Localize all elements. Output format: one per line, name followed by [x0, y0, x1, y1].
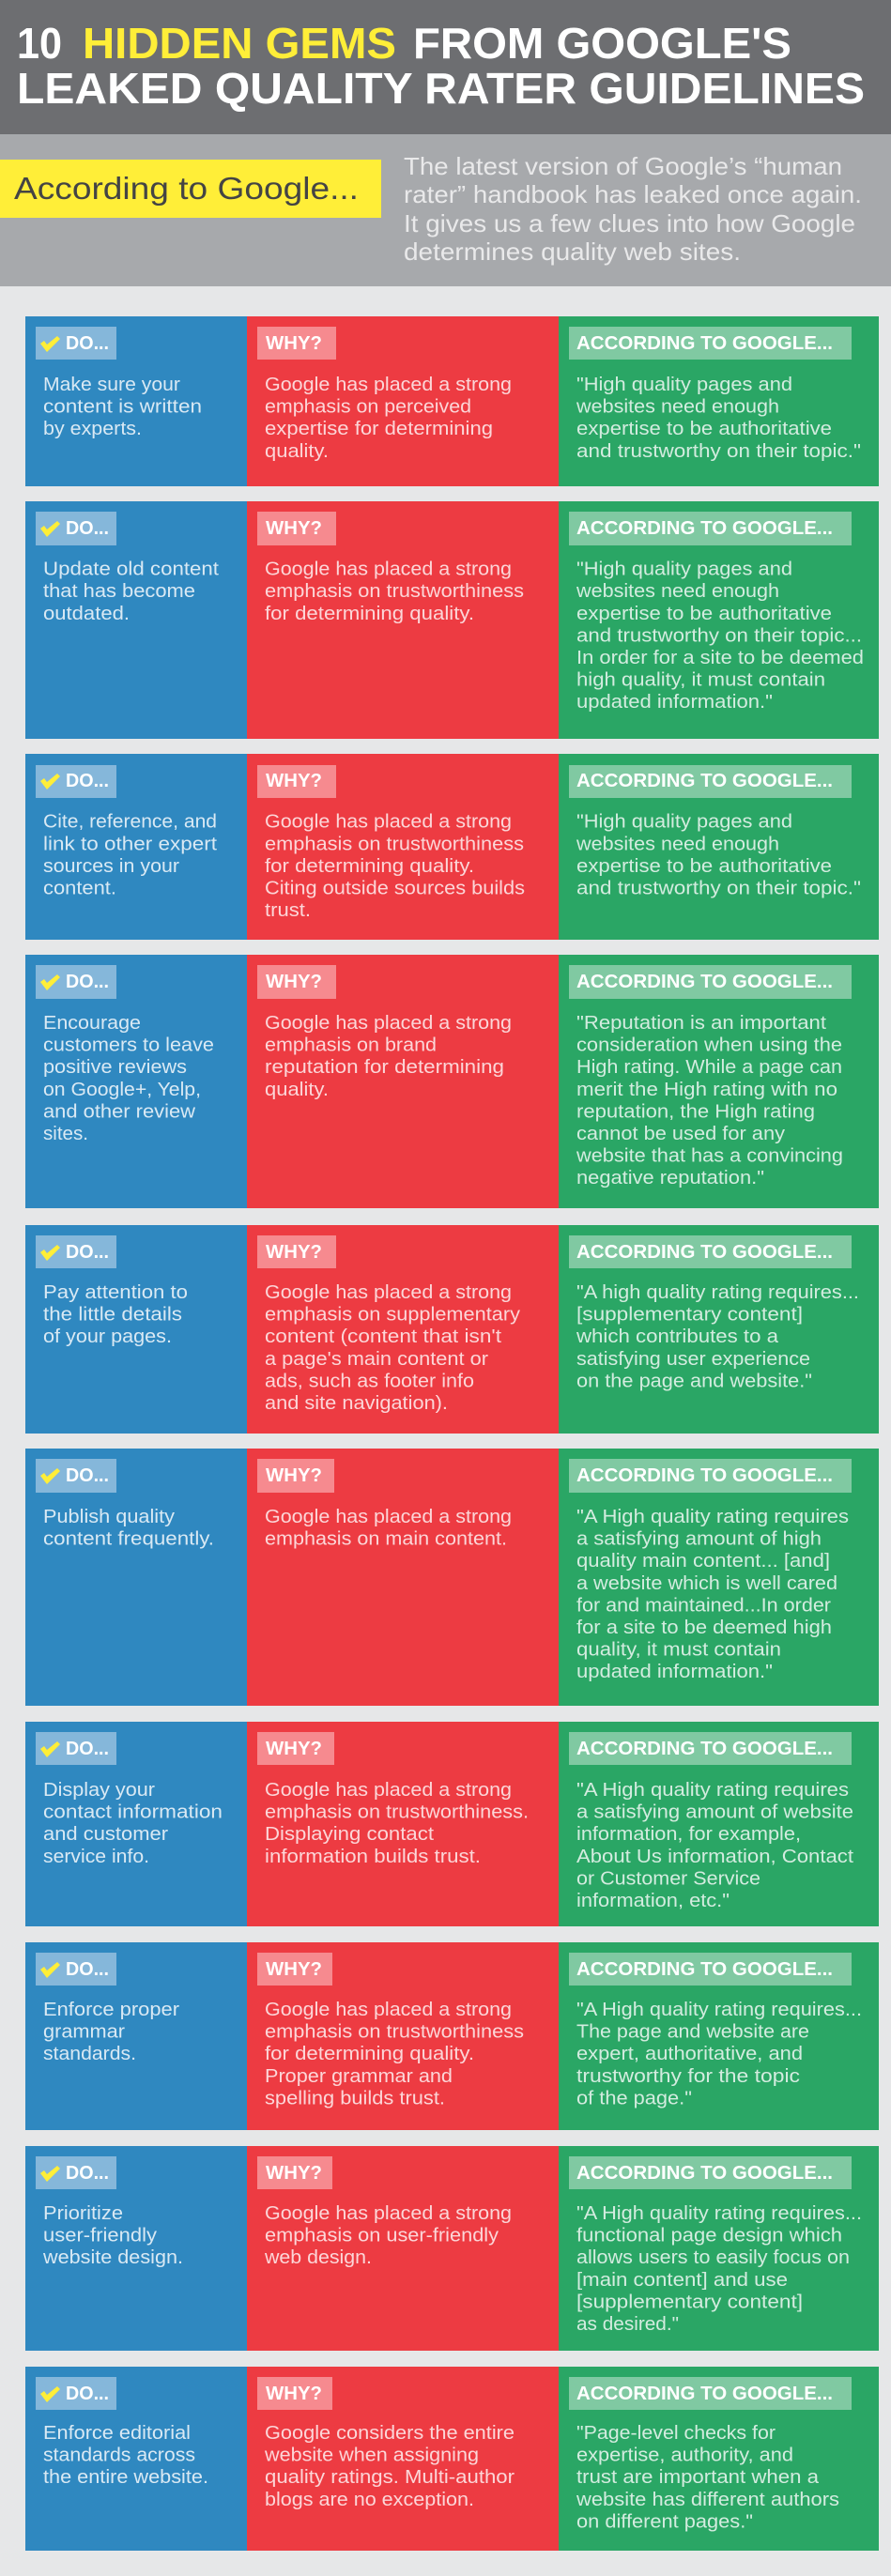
column: according to google: for a site to be deemed high — [576, 1618, 832, 1638]
column: do: on Google+, Yelp, — [43, 1080, 201, 1100]
column: do: Enforce editorial — [43, 2423, 191, 2444]
column: why: emphasis on trustworthiness — [265, 581, 524, 602]
column: according to google: "Page-level checks for — [576, 2423, 776, 2444]
column: according to google: information, etc." — [576, 1891, 730, 1911]
column: according to google: ACCORDING TO GOOGLE... — [576, 333, 833, 354]
column: according to google: updated information." — [576, 1662, 773, 1682]
column: why: content (content that isn't — [265, 1326, 501, 1347]
title: HIDDEN GEMS — [83, 19, 396, 68]
column: according to google: a satisfying amount of high — [576, 1529, 822, 1550]
intro text — [404, 152, 862, 266]
column: do: DO... — [66, 2163, 109, 2184]
column: do: Update old content — [43, 560, 219, 580]
column: why: ads, such as footer info — [265, 1371, 474, 1391]
panel: row 7 — [25, 1722, 879, 1926]
column: why: quality. — [265, 441, 329, 462]
column: do: sources in your — [43, 856, 179, 877]
column: according to google: ACCORDING TO GOOGLE... — [576, 771, 833, 791]
column: why: WHY? — [266, 1465, 322, 1486]
column: according to google: cannot be used for any — [576, 1124, 785, 1144]
column: why: emphasis on trustworthiness — [265, 834, 524, 854]
column: according to google: ACCORDING TO GOOGLE... — [576, 1465, 833, 1486]
column: why: Google has placed a strong — [265, 375, 512, 395]
column: why: Google has placed a strong — [265, 2000, 512, 2020]
intro text: It gives us a few clues into how Google — [404, 209, 855, 238]
column: do: Pay attention to — [43, 1282, 188, 1303]
column: according to google: websites need enough — [576, 581, 779, 602]
column: why: quality. — [265, 1080, 329, 1100]
column: according to google: "A high quality rating requires... — [576, 1282, 859, 1303]
column: do: standards across — [43, 2446, 195, 2466]
column: according to google: "Reputation is an important — [576, 1013, 826, 1034]
column: do: website design. — [42, 2247, 183, 2268]
column: according to google: on the page and website." — [576, 1371, 812, 1391]
column: do: DO... — [66, 972, 109, 992]
column: according to google: About Us information, Contact — [576, 1847, 853, 1867]
column: according to google: "High quality pages and — [576, 375, 792, 395]
column: according to google: ACCORDING TO GOOGLE... — [576, 1959, 833, 1980]
column: do: by experts. — [43, 419, 142, 439]
column: why — [247, 1225, 559, 1434]
column: do — [25, 754, 247, 940]
panel: row 3 — [25, 754, 879, 940]
column: according to google — [559, 1722, 879, 1926]
column: do: DO... — [66, 2384, 109, 2404]
column: why: Google has placed a strong — [265, 1013, 512, 1034]
column: according to google: quality, it must contain — [576, 1640, 781, 1661]
column: according to google — [559, 1449, 879, 1706]
column: do: the entire website. — [43, 2467, 208, 2488]
column: do: Prioritize — [43, 2203, 123, 2224]
column: why: for determining quality. — [265, 2044, 474, 2064]
panel: row 8 — [25, 1942, 879, 2130]
column: according to google: websites need enough — [576, 834, 779, 854]
column: why: Displaying contact — [265, 1824, 434, 1845]
column: do: Cite, reference, and — [43, 812, 217, 833]
column: do: DO... — [66, 1242, 109, 1263]
column: according to google: of the page." — [576, 2088, 692, 2108]
column: according to google: for and maintained...In order — [576, 1595, 831, 1616]
column: why: Citing outside sources builds — [265, 879, 525, 899]
column: do: the little details — [43, 1305, 182, 1326]
column: do: grammar — [43, 2022, 125, 2043]
column: according to google — [559, 754, 879, 940]
column: according to google: In order for a site to be deemed — [576, 648, 864, 668]
panel: row 2 — [25, 501, 879, 739]
column: do — [25, 501, 247, 739]
column: why: WHY? — [266, 972, 322, 992]
column: why: Google has placed a strong — [265, 2203, 512, 2224]
column: why: WHY? — [266, 771, 322, 791]
column: according to google: a satisfying amount of website — [576, 1802, 853, 1823]
title: 10 — [17, 19, 62, 68]
column: according to google: [main content] and use — [576, 2270, 788, 2291]
column: why: trust. — [265, 900, 311, 921]
column: according to google: expertise to be authoritative — [576, 604, 832, 624]
column: according to google: a website which is well cared — [576, 1573, 837, 1594]
column: do: outdated. — [43, 604, 130, 624]
column: according to google — [559, 316, 879, 486]
column: do: link to other expert — [43, 834, 217, 854]
column: do: Make sure your — [43, 375, 180, 395]
column: do: Enforce proper — [43, 2000, 179, 2020]
title — [17, 19, 865, 113]
column: why: WHY? — [266, 333, 322, 354]
column: do: DO... — [66, 518, 109, 539]
column: why: information builds trust. — [265, 1847, 481, 1867]
column: according to google: expertise to be authoritative — [576, 419, 832, 439]
column: why: emphasis on trustworthiness — [265, 2022, 524, 2043]
column: why — [247, 1449, 559, 1706]
column: why — [247, 1942, 559, 2130]
column: why: expertise for determining — [265, 419, 493, 439]
column: do: DO... — [66, 771, 109, 791]
column: why: and site navigation). — [265, 1393, 448, 1414]
column: according to google: and trustworthy on their topic." — [576, 879, 861, 899]
column: according to google: trustworthy for the topic — [576, 2066, 800, 2087]
column: why: emphasis on supplementary — [265, 1305, 520, 1326]
column: why: emphasis on main content. — [265, 1529, 507, 1550]
column: do: sites. — [43, 1124, 88, 1144]
column: according to google: updated information." — [576, 692, 773, 713]
column: according to google: or Customer Service — [576, 1868, 760, 1889]
column: do — [25, 1225, 247, 1434]
column: according to google — [559, 1225, 879, 1434]
column: according to google: quality main content... [and] — [576, 1551, 830, 1572]
column: according to google: functional page design which — [576, 2226, 842, 2246]
column: do: content. — [43, 879, 116, 899]
callout: According to Google — [0, 160, 381, 218]
column: why: emphasis on user-friendly — [265, 2226, 499, 2246]
column: according to google: "High quality pages and — [576, 812, 792, 833]
column: why: Google has placed a strong — [265, 1282, 512, 1303]
callout: According to Google: According to Google... — [14, 171, 359, 206]
column: do — [25, 1449, 247, 1706]
column: do: DO... — [66, 1465, 109, 1486]
panel: row 5 — [25, 1225, 879, 1434]
column: according to google: and trustworthy on their topic." — [576, 441, 861, 462]
column: according to google: ACCORDING TO GOOGLE... — [576, 2163, 833, 2184]
column: why: WHY? — [266, 1739, 322, 1759]
column: according to google — [559, 2367, 879, 2551]
column: why: Google has placed a strong — [265, 1780, 512, 1801]
panel: row 1 — [25, 316, 879, 486]
column: do: content frequently. — [43, 1529, 214, 1550]
column: do: user-friendly — [43, 2226, 157, 2246]
column: according to google: allows users to easily focus on — [576, 2247, 850, 2268]
column: according to google: The page and website are — [576, 2022, 809, 2043]
panel: row 6 — [25, 1449, 879, 1706]
column: do — [25, 2146, 247, 2351]
column: according to google — [559, 501, 879, 739]
column: according to google: which contributes to a — [576, 1326, 779, 1347]
column: why: emphasis on brand — [265, 1035, 437, 1056]
column: do — [25, 2367, 247, 2551]
column: according to google: ACCORDING TO GOOGLE... — [576, 518, 833, 539]
column: why: spelling builds trust. — [265, 2088, 445, 2108]
column: why: WHY? — [266, 2163, 322, 2184]
column: why: website when assigning — [264, 2446, 479, 2466]
column: do: customers to leave — [43, 1035, 214, 1056]
title: FROM GOOGLE'S — [413, 19, 791, 68]
column: why: WHY? — [266, 518, 322, 539]
column: do: and customer — [43, 1824, 168, 1845]
intro band — [0, 134, 891, 286]
panel: row 10 — [25, 2367, 879, 2551]
column: according to google: High rating. While a page can — [576, 1057, 842, 1078]
column: why — [247, 2367, 559, 2551]
column: according to google: website has different authors — [576, 2490, 839, 2510]
column: do: DO... — [66, 1739, 109, 1759]
column: according to google: "A High quality rating requires — [576, 1507, 849, 1527]
column: do — [25, 1942, 247, 2130]
intro text: determines quality web sites. — [404, 238, 741, 266]
column: why: for determining quality. — [265, 604, 474, 624]
intro text: The latest version of Google’s “human — [404, 152, 842, 180]
column: according to google: information, for example, — [576, 1824, 801, 1845]
column: do — [25, 1722, 247, 1926]
column: do — [25, 955, 247, 1208]
header: title band — [0, 0, 891, 134]
column: according to google: trust are important when a — [576, 2467, 820, 2488]
panel: row 4 — [25, 955, 879, 1208]
column: according to google: reputation, the High rating — [576, 1101, 815, 1122]
column: why: a page's main content or — [265, 1349, 488, 1370]
column: according to google: "High quality pages and — [576, 560, 792, 580]
column: according to google: high quality, it must contain — [576, 670, 825, 691]
column: according to google: website that has a convincing — [576, 1146, 843, 1167]
column: do — [25, 316, 247, 486]
column: according to google: websites need enough — [576, 397, 779, 418]
title: LEAKED QUALITY RATER GUIDELINES — [17, 64, 865, 113]
column: why — [247, 316, 559, 486]
column: according to google: consideration when using the — [576, 1035, 842, 1056]
column: do: that has become — [43, 581, 195, 602]
column: according to google: ACCORDING TO GOOGLE... — [576, 972, 833, 992]
column: why: for determining quality. — [265, 856, 474, 877]
column: according to google: expertise to be authoritative — [576, 856, 832, 877]
column: why: web design. — [264, 2247, 372, 2268]
column: according to google — [559, 955, 879, 1208]
column: do: Encourage — [43, 1013, 141, 1034]
column: do: Publish quality — [43, 1507, 175, 1527]
column: why — [247, 2146, 559, 2351]
column: why: WHY? — [266, 1959, 322, 1980]
column: why — [247, 754, 559, 940]
column: according to google: expertise, authority, and — [576, 2446, 793, 2466]
column: why: WHY? — [266, 1242, 322, 1263]
column: do: and other review — [43, 1101, 196, 1122]
column: do: DO... — [66, 333, 109, 354]
column: why: Google considers the entire — [265, 2423, 515, 2444]
column: why — [247, 955, 559, 1208]
column: according to google: ACCORDING TO GOOGLE... — [576, 1739, 833, 1759]
column: why: Google has placed a strong — [265, 812, 512, 833]
column: according to google: expert, authoritative, and — [576, 2044, 803, 2064]
column: according to google: as desired." — [576, 2314, 679, 2335]
column: according to google: and trustworthy on their topic... — [576, 625, 862, 646]
column: do: service info. — [43, 1847, 149, 1867]
column: according to google: ACCORDING TO GOOGLE... — [576, 2384, 833, 2404]
column: according to google: [supplementary content] — [576, 2292, 803, 2312]
column: do: DO... — [66, 1959, 109, 1980]
intro text: rater” handbook has leaked once again. — [404, 180, 862, 208]
column: do: contact information — [43, 1802, 223, 1823]
column: why: Google has placed a strong — [265, 1507, 512, 1527]
column: why — [247, 1722, 559, 1926]
column: according to google — [559, 2146, 879, 2351]
column: why: reputation for determining — [265, 1057, 504, 1078]
panel: row 9 — [25, 2146, 879, 2351]
column: do: positive reviews — [43, 1057, 187, 1078]
column: why: blogs are no exception. — [265, 2490, 474, 2510]
column: according to google: "A High quality rating requires... — [576, 2203, 862, 2224]
column: why: emphasis on trustworthiness. — [265, 1802, 529, 1823]
column: according to google: ACCORDING TO GOOGLE... — [576, 1242, 833, 1263]
column: according to google: "A High quality rating requires — [576, 1780, 849, 1801]
column: according to google: satisfying user experience — [576, 1349, 810, 1370]
column: do: content is written — [43, 397, 202, 418]
column: according to google: on different pages." — [576, 2511, 753, 2532]
column: do: standards. — [43, 2044, 136, 2064]
column: why: Proper grammar and — [265, 2066, 453, 2087]
column: according to google: merit the High rating with no — [576, 1080, 837, 1100]
column: why — [247, 501, 559, 739]
column: according to google: [supplementary content] — [576, 1305, 803, 1326]
column: why: Google has placed a strong — [265, 560, 512, 580]
column: do: Display your — [43, 1780, 155, 1801]
column: according to google: "A High quality rating requires... — [576, 2000, 862, 2020]
column: why: quality ratings. Multi-author — [265, 2467, 515, 2488]
column: according to google: negative reputation." — [576, 1168, 764, 1188]
column: why: emphasis on perceived — [265, 397, 471, 418]
column: why: WHY? — [266, 2384, 322, 2404]
column: do: of your pages. — [43, 1326, 172, 1347]
column: according to google — [559, 1942, 879, 2130]
